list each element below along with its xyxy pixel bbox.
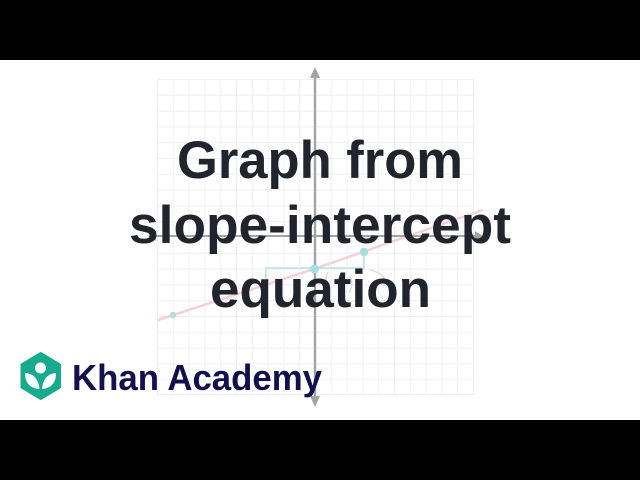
graph: coordinate plane [148,67,483,407]
title: Graph from [177,131,463,190]
vertical axis [310,67,320,407]
plotted points [170,248,368,318]
bottom black letterbox bar [0,420,640,480]
title [129,131,511,319]
faint fraction label [326,270,385,293]
slope triangle: run and rise [266,252,364,283]
top black letterbox bar [0,0,640,60]
brand name: Khan Academy [72,357,322,398]
sloped line [158,210,483,320]
title: equation [210,260,431,319]
horizontal axis [148,231,483,241]
title: slope-intercept [129,196,511,255]
icon: Khan Academy hexagon logo [22,353,60,399]
grid lines [157,79,474,394]
